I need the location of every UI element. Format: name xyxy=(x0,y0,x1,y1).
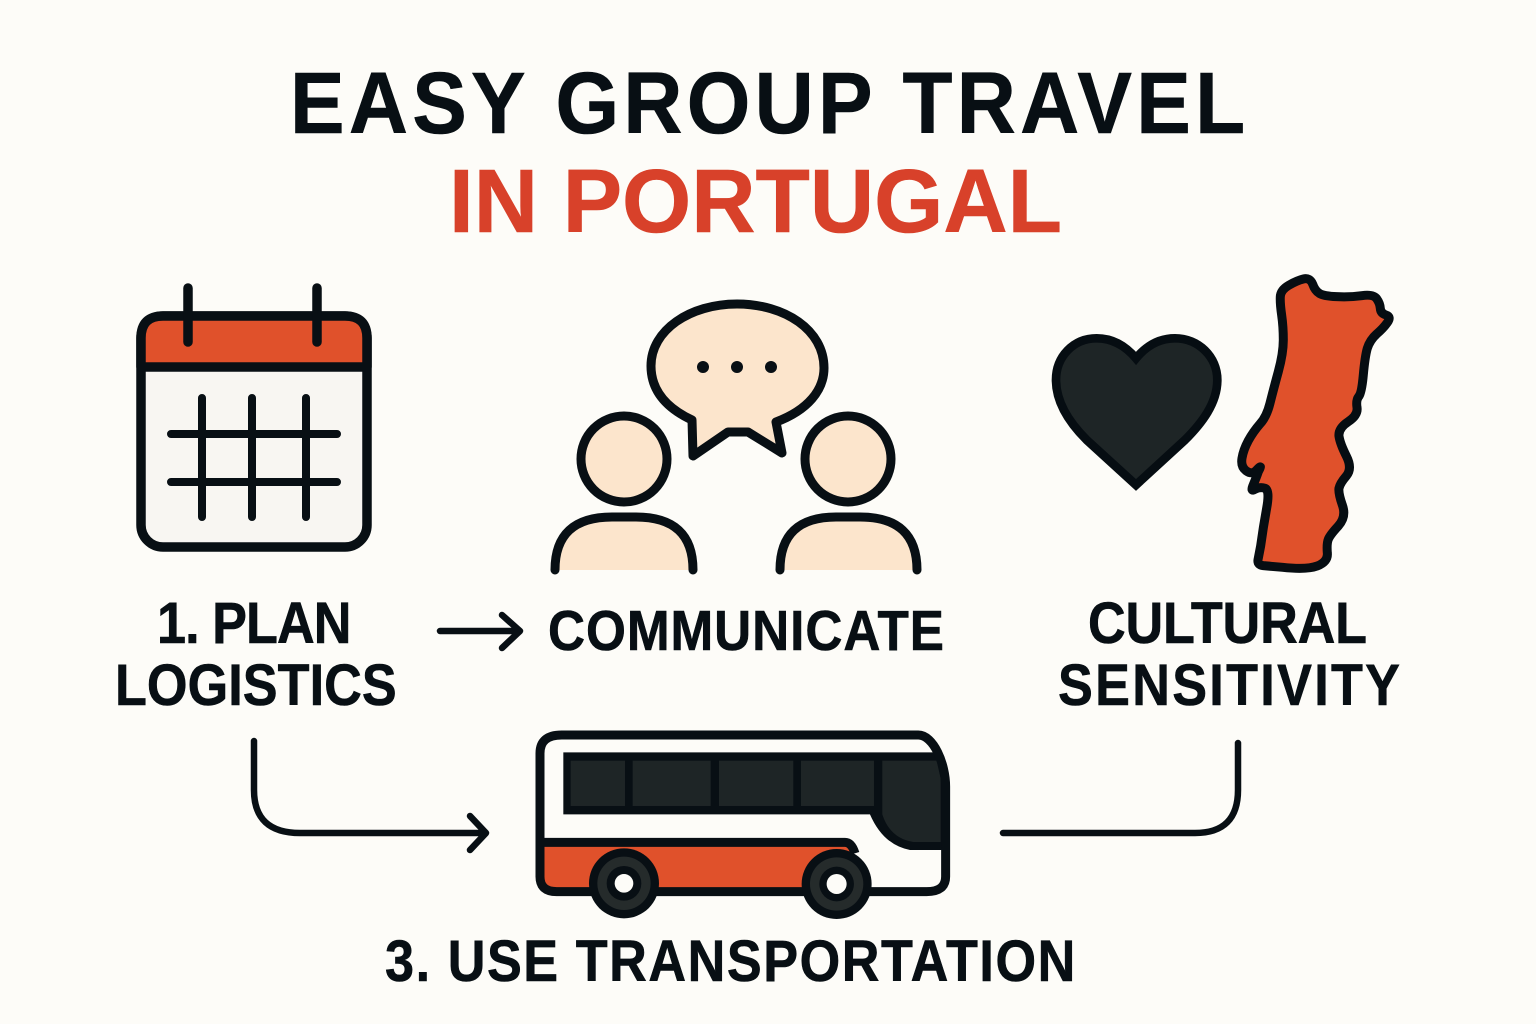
title xyxy=(290,55,1245,252)
speech bubble xyxy=(651,304,824,456)
bus windows xyxy=(563,752,942,850)
icon: bus xyxy=(540,735,946,919)
icon: two people talking xyxy=(555,304,917,570)
bus lower orange band xyxy=(540,842,853,892)
person left xyxy=(555,416,693,570)
speech dots xyxy=(697,361,777,373)
front wheel xyxy=(802,849,872,919)
rear wheel xyxy=(589,848,659,918)
label: cultural sensitivity: CULTURAL xyxy=(1088,590,1367,656)
label: communicate: COMMUNICATE xyxy=(548,600,944,663)
label: cultural sensitivity xyxy=(1058,590,1400,718)
label: cultural sensitivity: SENSITIVITY xyxy=(1058,652,1400,718)
label: 1. plan logistics: LOGISTICS xyxy=(115,652,397,718)
icon: heart xyxy=(1056,338,1217,485)
label: 3. use transportation: 3. USE TRANSPORTATION xyxy=(385,928,1075,994)
person right xyxy=(780,416,917,570)
label: 1. plan logistics: 1. PLAN xyxy=(157,590,351,656)
arrow: plan logistics to bus xyxy=(254,741,486,850)
icon: map of Portugal xyxy=(1242,279,1389,568)
icon: calendar xyxy=(141,288,367,547)
title line 1: EASY GROUP TRAVEL xyxy=(290,55,1245,152)
connector: cultural sensitivity to bus xyxy=(1003,743,1238,833)
label: 1. plan logistics xyxy=(115,590,397,718)
title line 2: IN PORTUGAL xyxy=(449,152,1062,252)
arrow: plan to communicate xyxy=(440,615,520,648)
